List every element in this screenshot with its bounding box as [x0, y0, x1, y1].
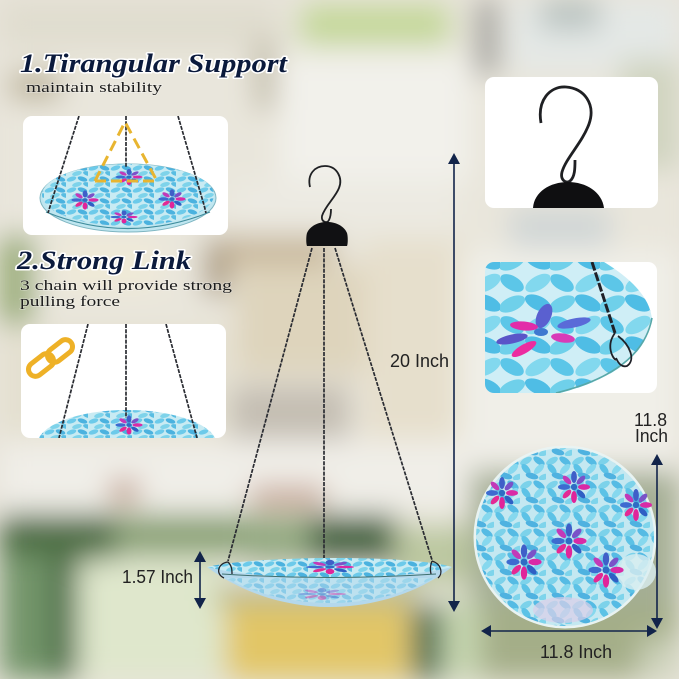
rim edge	[222, 574, 436, 578]
three chains	[59, 324, 197, 438]
heading: triangular support: 1.Tirangular Support	[20, 49, 288, 78]
zoomed plate	[485, 262, 652, 393]
large flower	[495, 301, 592, 360]
text: maintain stability: maintain stability	[26, 80, 163, 96]
heading: strong link: 2.Strong Link	[16, 246, 191, 275]
icon: yellow chain link	[26, 337, 75, 379]
chain end loops	[219, 561, 441, 578]
black dome cap	[306, 222, 348, 246]
main hanging bird bath	[207, 166, 452, 607]
pink flower	[306, 560, 354, 574]
label: depth 11.8 inch: 11.8	[634, 410, 667, 430]
label: width 11.8 inch: 11.8 Inch	[540, 642, 612, 662]
dimension: 20 inch arrow	[448, 153, 460, 612]
label: depth 11.8 inch	[634, 410, 668, 446]
bowl faint mosaic	[226, 578, 434, 603]
panel: strong link photo	[21, 324, 226, 438]
panel: hook close-up	[485, 77, 658, 208]
mosaic flowers	[486, 471, 652, 588]
plate with mosaic	[40, 164, 216, 232]
text: chain description: 3 chain will provide strong	[20, 278, 233, 294]
icon: dashed yellow triangle	[95, 122, 157, 181]
mosaic rim	[207, 558, 452, 578]
icon: S hook	[540, 87, 591, 182]
dimension: 1.57 inch arrow	[194, 551, 206, 609]
dimension: width arrow	[481, 625, 657, 637]
label: 20 inch: 20 Inch	[390, 351, 449, 371]
black dome cap	[533, 182, 604, 208]
faded pink patch	[533, 597, 593, 623]
hook	[309, 166, 340, 222]
text: chain description	[20, 278, 233, 310]
panel: mosaic detail close-up	[485, 262, 657, 393]
text: chain description: pulling force	[20, 294, 120, 310]
dimension: depth arrow	[651, 454, 663, 629]
label: 1.57 inch: 1.57 Inch	[122, 567, 193, 587]
round top view plate	[474, 446, 656, 628]
chain and hook	[592, 262, 631, 366]
chains	[228, 248, 432, 561]
faint bowl flower	[298, 588, 346, 600]
label: depth 11.8 inch: Inch	[635, 426, 668, 446]
three chains	[48, 116, 206, 213]
white faded patch	[616, 554, 656, 590]
bowl underside	[207, 567, 452, 607]
panel: triangular support photo	[23, 116, 228, 235]
plate with mosaic	[39, 410, 215, 438]
